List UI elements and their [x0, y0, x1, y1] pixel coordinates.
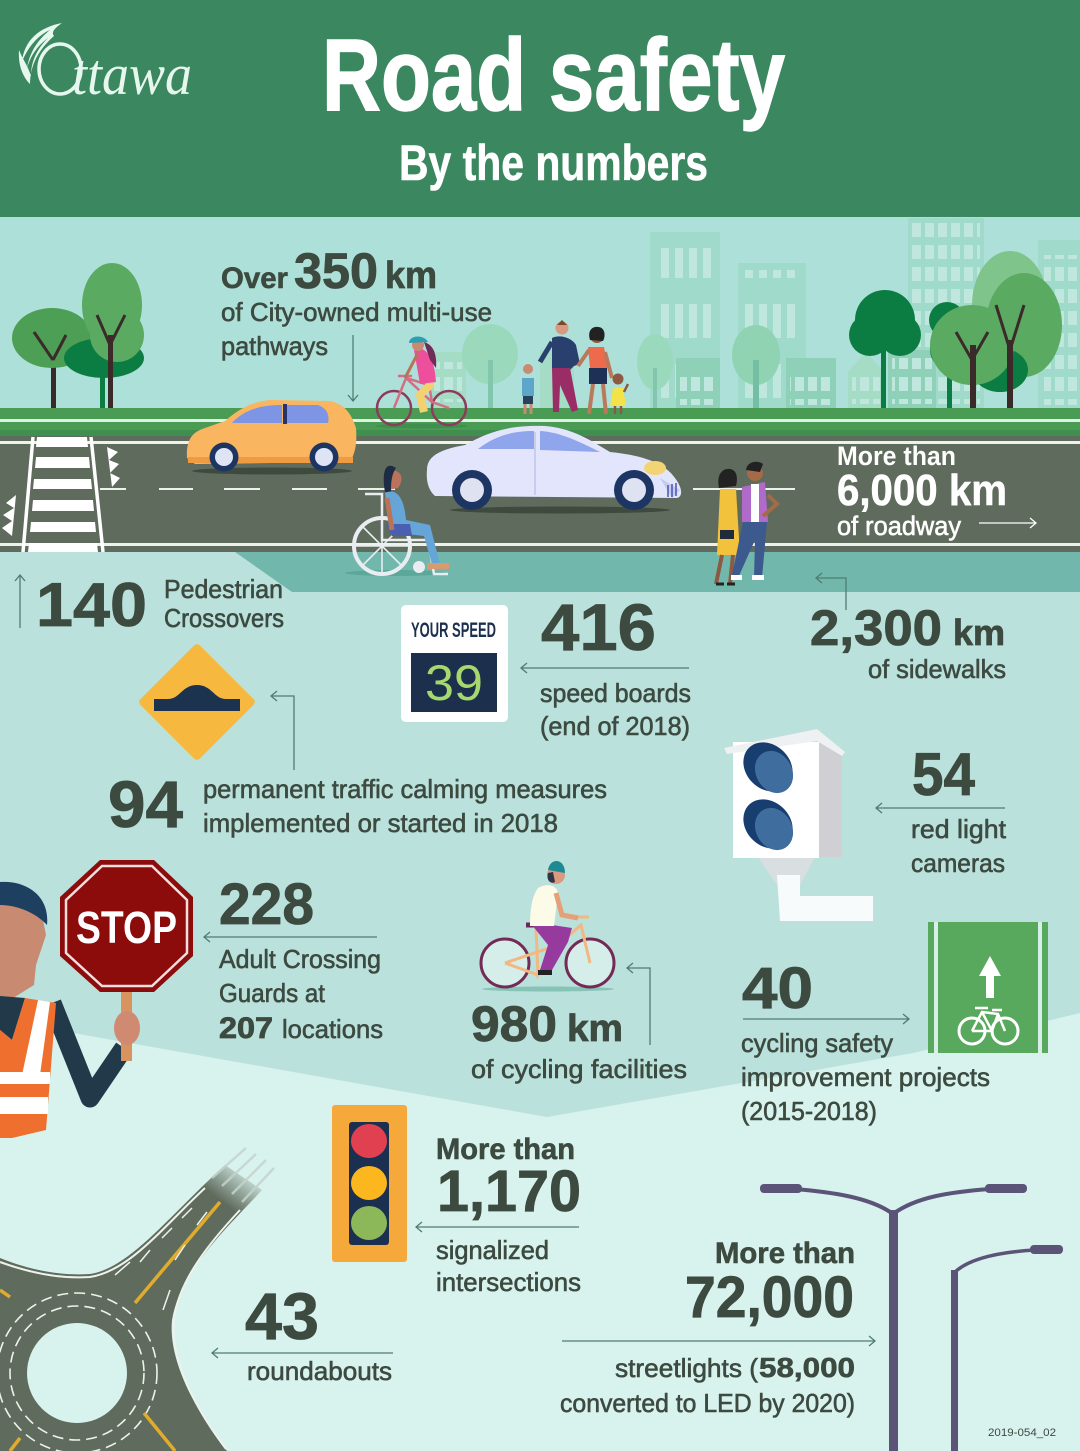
stat: signalized intersections: More than — [436, 1133, 575, 1166]
stat: cycling projects: 40 — [742, 956, 813, 1021]
Ottawa logo: ttawa — [72, 42, 192, 107]
walking couple — [716, 462, 777, 584]
arrow: roundabouts — [212, 1348, 393, 1358]
stat: red light cameras: cameras — [911, 848, 1005, 878]
stat: crossing guards: Guards at — [219, 978, 326, 1008]
stat: cycling projects: cycling safety — [741, 1028, 893, 1058]
stat: roundabouts — [212, 1279, 393, 1386]
stat: cycling facilities: 980 — [471, 996, 557, 1052]
stat: signalized intersections: intersections — [436, 1267, 581, 1297]
stat: signalized intersections — [416, 1133, 581, 1297]
stat: red light cameras: 54 — [912, 741, 976, 808]
stat: cycling projects: improvement projects — [741, 1062, 990, 1092]
arrow: cycling facilities — [627, 963, 650, 1045]
arrow: speed boards — [521, 663, 689, 673]
stat: crossing guards: Adult Crossing — [219, 944, 381, 974]
stat: pedestrian crossovers: Crossovers — [164, 603, 284, 633]
stat: cycling facilities — [471, 963, 687, 1084]
stat: crossing guards: 207 — [219, 1012, 273, 1045]
stat: crossing guards: locations — [282, 1014, 383, 1044]
stat: speed boards: 416 — [541, 590, 656, 664]
arrow: red light cameras — [876, 803, 1005, 813]
icon: traffic light — [332, 1105, 407, 1262]
white car — [427, 426, 681, 514]
stat: streetlights: 58,000 — [759, 1352, 855, 1383]
road — [0, 436, 1080, 552]
stat: roundabouts: roundabouts — [247, 1356, 392, 1386]
stat: multi-use pathways: of City-owned multi-use — [221, 297, 492, 327]
stat: speed boards: speed boards — [540, 678, 691, 708]
icon: speed bump sign — [138, 643, 256, 761]
man — [540, 320, 580, 412]
stat: red light cameras — [876, 741, 1007, 878]
crosswalk — [2, 437, 120, 552]
skyline — [430, 218, 1080, 408]
stat: multi-use pathways: 350 — [294, 243, 378, 299]
stat: cycling projects: (2015-2018) — [741, 1096, 877, 1126]
stat: signalized intersections: signalized — [436, 1235, 549, 1265]
icon: bike lane — [928, 922, 1048, 1053]
stat: cycling projects — [741, 956, 990, 1126]
title: Road safety — [322, 18, 785, 132]
guard figure — [0, 882, 124, 1138]
icon: cyclist — [481, 861, 614, 992]
stat: streetlights: More than — [715, 1237, 855, 1270]
stat: streetlights: converted to LED by 2020) — [560, 1388, 855, 1418]
icon: speed board: YOUR SPEED — [411, 619, 496, 642]
stat: traffic calming measures: permanent traffic calming measures — [203, 774, 607, 804]
icon: roundabout — [0, 1148, 274, 1451]
tree group: left — [12, 263, 144, 408]
stat: roadway: of roadway — [837, 511, 961, 541]
stat: cycling facilities: of cycling facilities — [471, 1054, 687, 1084]
man in purple — [731, 462, 777, 580]
arrow: crossovers — [15, 575, 25, 628]
arrow: pathway — [348, 335, 358, 401]
stat: multi-use pathways — [221, 243, 492, 401]
arrow: traffic calming — [271, 691, 294, 770]
stat: traffic calming measures: implemented or started in 2018 — [203, 808, 558, 838]
arrow: sidewalks — [816, 573, 846, 610]
icon: streetlights — [760, 1184, 1063, 1451]
stat: red light cameras: red light — [911, 814, 1007, 844]
crossing guard with stop sign — [0, 860, 193, 1138]
boy — [522, 364, 534, 414]
stat: speed boards: (end of 2018) — [540, 711, 690, 741]
street scene background — [0, 217, 1080, 409]
arrow: crossing guards — [204, 932, 377, 942]
stat: sidewalks — [810, 573, 1006, 684]
stat: traffic calming measures — [108, 691, 607, 841]
stat: multi-use pathways: Over — [221, 262, 288, 295]
header banner — [0, 0, 1080, 217]
stat: roundabouts: 43 — [245, 1279, 319, 1353]
grass and multi-use pathway — [0, 408, 1080, 437]
person in wheelchair — [345, 466, 449, 576]
girl — [610, 374, 628, 414]
stat: speed boards — [521, 590, 691, 741]
stat: roadway: More than — [837, 441, 956, 471]
stat: pedestrian crossovers — [15, 571, 284, 640]
walking family — [522, 320, 628, 414]
icon: speed board: 39 — [425, 655, 483, 711]
stat: pedestrian crossovers: Pedestrian — [164, 574, 283, 604]
stat: traffic calming measures: 94 — [108, 767, 183, 841]
icon: speed board — [401, 605, 508, 722]
subtitle: By the numbers — [399, 135, 708, 191]
arrow: roadway — [979, 518, 1036, 528]
stat: crossing guards: 228 — [219, 872, 314, 937]
stat: pedestrian crossovers: 140 — [36, 571, 147, 640]
tree group: right — [849, 251, 1062, 408]
woman — [578, 327, 612, 414]
stop sign — [60, 860, 193, 1061]
document code: 2019-054_02 — [988, 1427, 1056, 1439]
sidewalk — [235, 552, 1080, 592]
Ottawa logo — [19, 23, 192, 107]
stat: streetlights: streetlights ( — [615, 1353, 758, 1383]
woman cyclist on pathway — [376, 336, 468, 428]
arrow: streetlights — [562, 1336, 875, 1346]
stat: streetlights: 72,000 — [685, 1265, 854, 1330]
stat: roadway: 6,000 km — [837, 466, 1007, 515]
stop sign: STOP — [76, 902, 177, 953]
stat: streetlights — [560, 1237, 875, 1418]
stat: signalized intersections: 1,170 — [437, 1159, 581, 1224]
woman in yellow — [716, 469, 740, 584]
stat: sidewalks: of sidewalks — [868, 654, 1006, 684]
arrow: intersections — [416, 1222, 579, 1232]
stat: cycling facilities: km — [567, 1008, 623, 1050]
icon: red light camera — [724, 729, 873, 921]
stat: roadway — [837, 441, 1036, 541]
stat: sidewalks: km — [953, 612, 1005, 653]
stat: multi-use pathways: pathways — [221, 331, 328, 361]
stat: crossing guards — [204, 872, 383, 1045]
stat: sidewalks: 2,300 — [810, 600, 942, 656]
arrow: cycling projects — [743, 1014, 909, 1024]
yellow car — [187, 400, 356, 474]
stat: multi-use pathways: km — [385, 255, 437, 297]
